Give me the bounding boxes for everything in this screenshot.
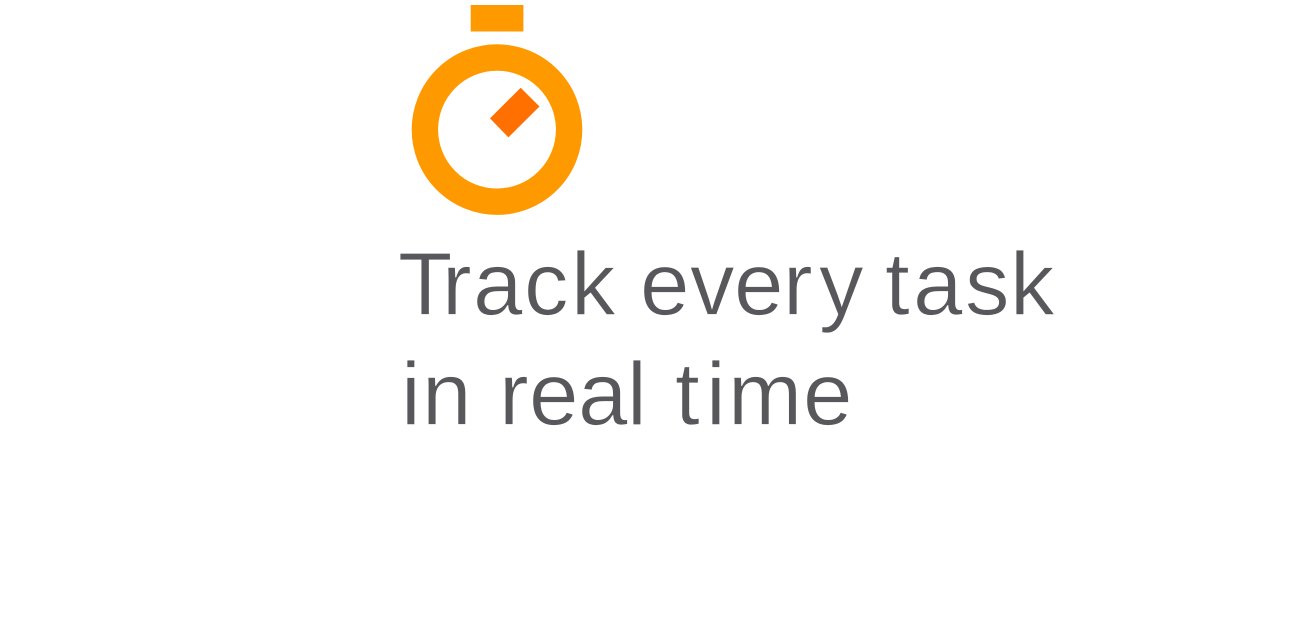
icon: stopwatch <box>425 5 569 202</box>
heading: Track every task <box>398 234 1055 334</box>
heading: in real time <box>401 344 852 444</box>
heading <box>398 234 1055 444</box>
